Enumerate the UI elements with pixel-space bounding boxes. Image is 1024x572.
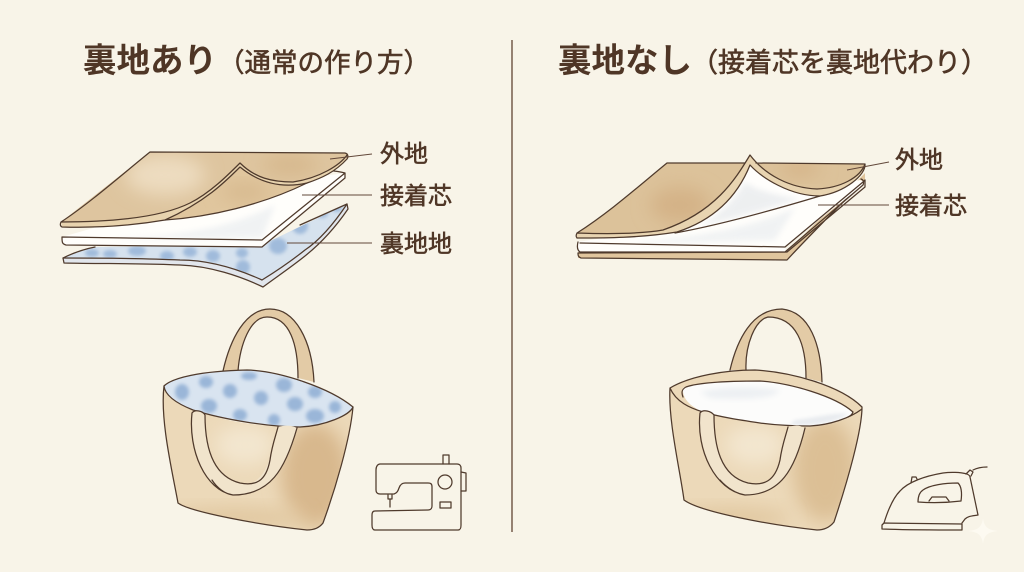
label: outer fabric xyxy=(330,141,428,168)
front handle xyxy=(699,411,805,495)
layer diagram: with lining xyxy=(60,152,348,287)
folded rim xyxy=(61,153,348,227)
layer diagram: without lining xyxy=(576,155,865,260)
white interfacing layer xyxy=(61,169,345,247)
tote bag with white interior xyxy=(670,309,862,530)
label: interfacing: 接着芯 xyxy=(380,183,452,210)
layer labels: without lining xyxy=(818,147,967,220)
white interfacing layer xyxy=(577,179,864,252)
center divider xyxy=(511,40,513,532)
sparkle watermark xyxy=(968,518,998,544)
label: outer fabric: 外地 xyxy=(380,141,428,168)
bag body xyxy=(163,386,353,530)
label: lining fabric: 裏地地 xyxy=(380,231,452,258)
title: without lining xyxy=(558,43,988,80)
label: outer fabric xyxy=(847,147,943,174)
white interior xyxy=(683,381,853,426)
layer labels: with lining xyxy=(287,141,452,258)
white flap xyxy=(675,165,820,233)
title: with lining xyxy=(83,43,430,80)
front handle xyxy=(191,411,297,495)
bottom tan layer xyxy=(578,173,865,260)
title: without lining: （接着芯を裏地代わり） xyxy=(691,48,988,78)
title: with lining: 裏地あり xyxy=(83,43,217,80)
blue inside xyxy=(164,370,353,427)
bag body xyxy=(670,370,862,530)
label: outer fabric: 外地 xyxy=(895,147,943,174)
folded rim xyxy=(577,155,865,238)
tan outer fabric xyxy=(576,155,865,238)
title: without lining: 裏地なし xyxy=(558,43,692,80)
title: with lining: （通常の作り方） xyxy=(218,48,430,78)
tote bag with blue lining xyxy=(163,309,353,530)
label: interfacing: 接着芯 xyxy=(895,193,967,220)
tan outer fabric xyxy=(60,152,348,227)
blue lining layer xyxy=(63,204,348,287)
back handle xyxy=(223,309,314,382)
back handle xyxy=(730,309,822,382)
icon: iron xyxy=(882,467,987,530)
icon: sewing machine xyxy=(372,455,466,530)
folded flap xyxy=(165,167,307,220)
